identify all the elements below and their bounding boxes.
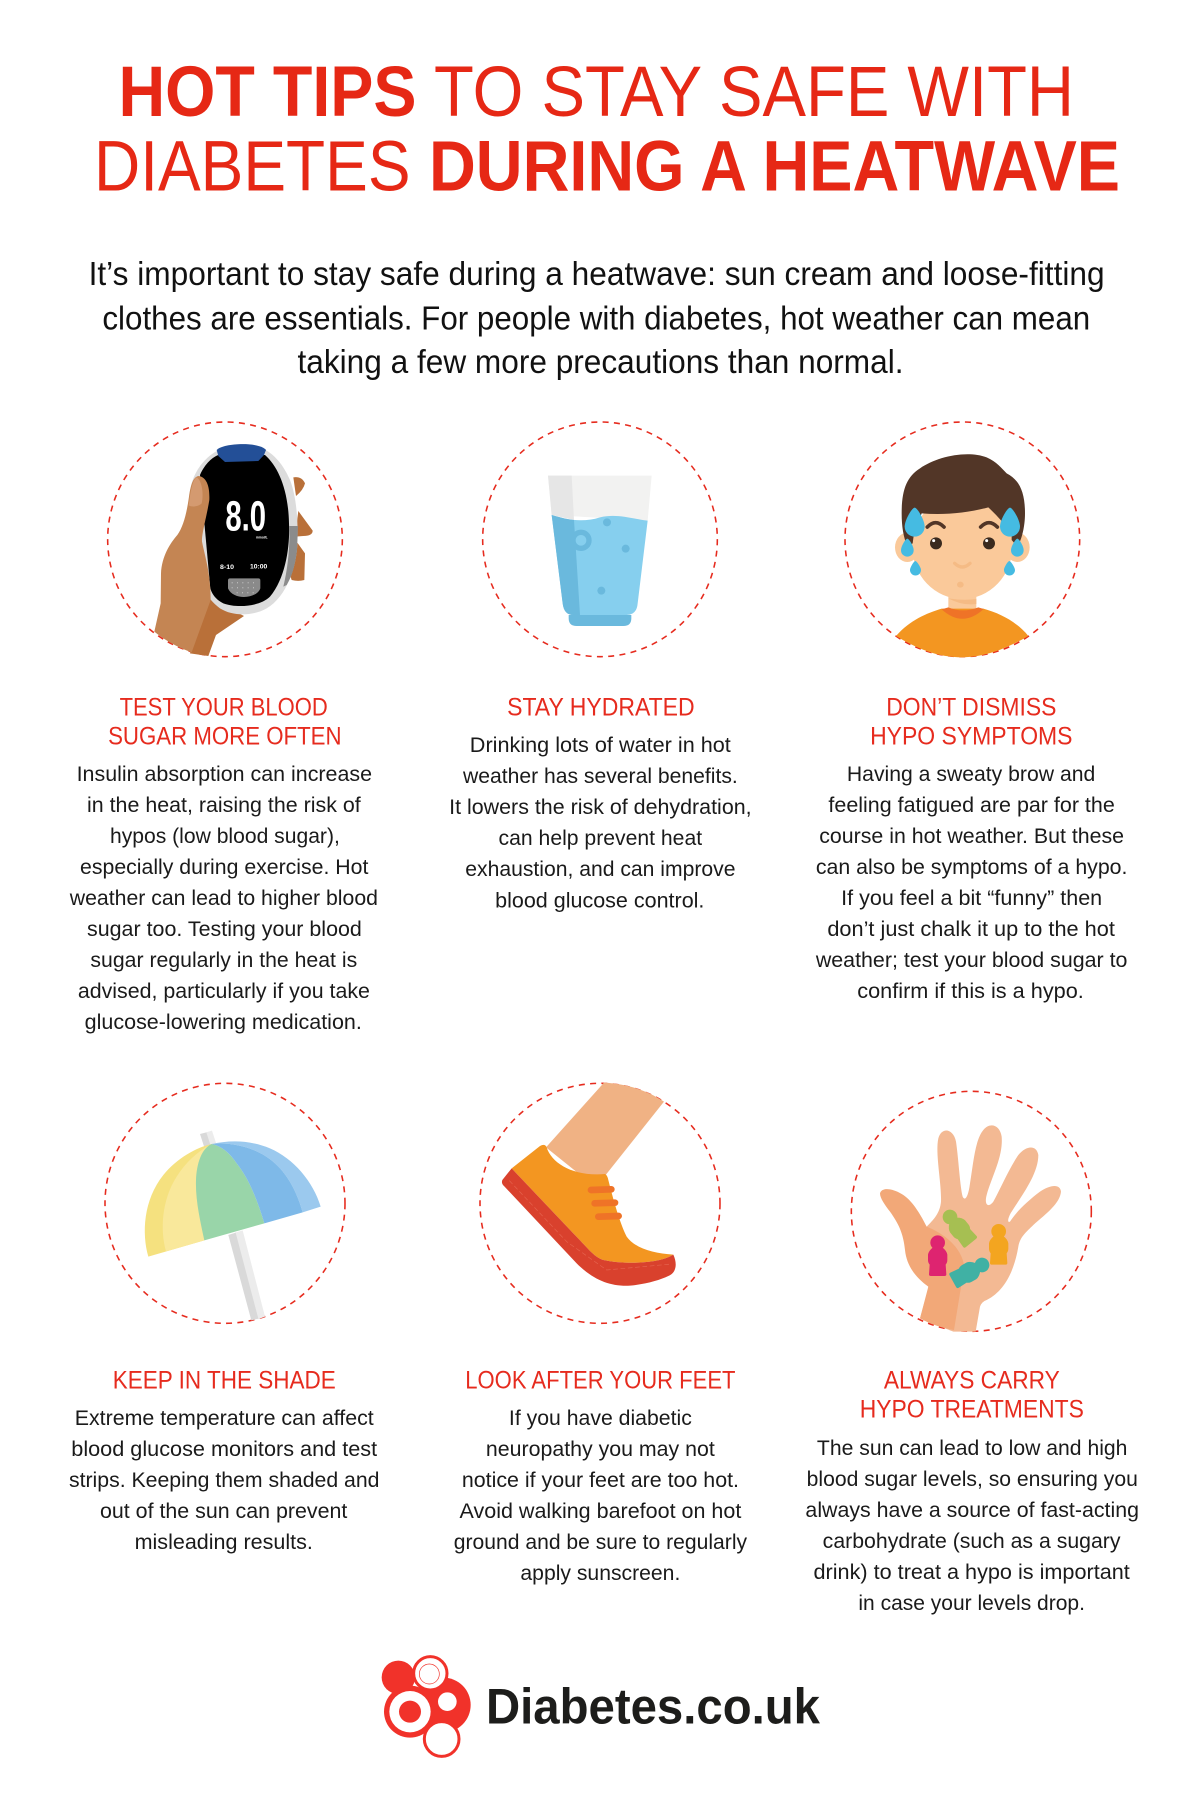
heading: KEEP IN THE SHADE (113, 1367, 336, 1395)
body text: advised, particularly if you take (78, 980, 370, 1003)
icon: parasol (105, 1083, 345, 1323)
body text: course in hot weather. But these (819, 825, 1124, 848)
body text: ground and be sure to regularly (454, 1531, 748, 1554)
body text: can help prevent heat (499, 827, 702, 850)
body text: misleading results. (135, 1531, 313, 1554)
intro text: It’s important to stay safe during a heatwave: sun cream and loose-fitting (89, 256, 1105, 293)
heading: LOOK AFTER YOUR FEET (465, 1367, 735, 1395)
icon: hand holding sweets (851, 1091, 1091, 1332)
body text: can also be symptoms of a hypo. (816, 856, 1127, 879)
heading (870, 694, 1073, 750)
body text: Drinking lots of water in hot (470, 734, 731, 757)
logo: Diabetes.co.uk (382, 1657, 820, 1756)
body text (805, 1437, 1139, 1615)
panel: always carry hypo treatments (805, 1091, 1139, 1615)
title (94, 52, 1120, 207)
body text: don’t just chalk it up to the hot (827, 918, 1115, 941)
body text (454, 1407, 748, 1585)
body text: feeling fatigued are par for the (828, 794, 1115, 817)
heading: HYPO SYMPTOMS (870, 722, 1073, 750)
panel: look after your feet (454, 1083, 748, 1585)
body text: notice if your feet are too hot. (462, 1469, 739, 1492)
body text: Insulin absorption can increase (77, 763, 372, 786)
body text (69, 763, 378, 1034)
body text: carbohydrate (such as a sugary (823, 1530, 1121, 1553)
body text: hypos (low blood sugar), (110, 825, 340, 848)
icon: blood glucose meter in hand: 8.0 (225, 493, 266, 541)
body text: The sun can lead to low and high (817, 1437, 1127, 1460)
body text: especially during exercise. Hot (80, 856, 369, 879)
icon: blood glucose meter in hand: 8-10 (220, 565, 235, 571)
title: HOT TIPS (118, 52, 416, 132)
body text (69, 1407, 379, 1554)
body text: always have a source of fast-acting (805, 1499, 1139, 1522)
title: DURING A HEATWAVE (429, 127, 1120, 207)
heading (108, 694, 342, 750)
heading: DON’T DISMISS (886, 694, 1056, 722)
body text: confirm if this is a hypo. (857, 980, 1084, 1003)
body text: It lowers the risk of dehydration, (449, 796, 752, 819)
body text: If you have diabetic (509, 1407, 692, 1430)
icon: blood glucose meter in hand: 10:00 (250, 565, 268, 571)
body text: blood glucose monitors and test (71, 1438, 377, 1461)
body text: weather can lead to higher blood (69, 887, 378, 910)
body text (815, 763, 1127, 1003)
panel: test your blood sugar (69, 422, 378, 1034)
body text: glucose-lowering medication. (85, 1011, 362, 1034)
body text: neuropathy you may not (486, 1438, 715, 1461)
heading: STAY HYDRATED (507, 694, 695, 722)
heading: TEST YOUR BLOOD (120, 694, 328, 722)
logo wordmark: Diabetes.co.uk (486, 1678, 820, 1734)
heading: ALWAYS CARRY (884, 1367, 1060, 1395)
body text: apply sunscreen. (520, 1562, 680, 1585)
icon: glass of water (483, 422, 717, 657)
icon: shoe and leg (480, 1083, 720, 1323)
body text: in case your levels drop. (858, 1592, 1085, 1615)
body text: drink) to treat a hypo is important (814, 1561, 1130, 1584)
intro text: clothes are essentials. For people with diabetes, hot weather can mean (102, 300, 1090, 338)
body text: Having a sweaty brow and (847, 763, 1095, 786)
body text: Avoid walking barefoot on hot (460, 1500, 741, 1523)
panel: stay hydrated (449, 422, 752, 912)
heading: SUGAR MORE OFTEN (108, 722, 342, 750)
panel: hypo symptoms (815, 422, 1127, 1003)
body text: in the heat, raising the risk of (87, 794, 361, 817)
title: DIABETES (94, 127, 410, 207)
icon: blood glucose meter in hand: mmol/L (256, 536, 268, 540)
body text: strips. Keeping them shaded and (69, 1469, 379, 1492)
icon: blood glucose meter in hand (108, 422, 342, 657)
body text: sugar too. Testing your blood (87, 918, 362, 941)
body text: If you feel a bit “funny” then (841, 887, 1102, 910)
logo mark (382, 1657, 471, 1756)
body text: weather; test your blood sugar to (815, 949, 1127, 972)
title: TO STAY SAFE WITH (434, 52, 1074, 132)
body text: blood sugar levels, so ensuring you (807, 1468, 1138, 1491)
body text (449, 734, 752, 912)
body text: weather has several benefits. (462, 765, 738, 788)
body text: blood glucose control. (495, 889, 704, 912)
heading: HYPO TREATMENTS (860, 1396, 1084, 1424)
body text: out of the sun can prevent (100, 1500, 347, 1523)
icon: sweating boy (845, 422, 1080, 657)
intro text: taking a few more precautions than normal. (298, 344, 904, 381)
body text: sugar regularly in the heat is (90, 949, 357, 972)
body text: Extreme temperature can affect (75, 1407, 374, 1430)
panel: keep in the shade (69, 1083, 379, 1554)
intro text (89, 256, 1105, 381)
body text: exhaustion, and can improve (465, 858, 735, 881)
heading (860, 1367, 1084, 1424)
